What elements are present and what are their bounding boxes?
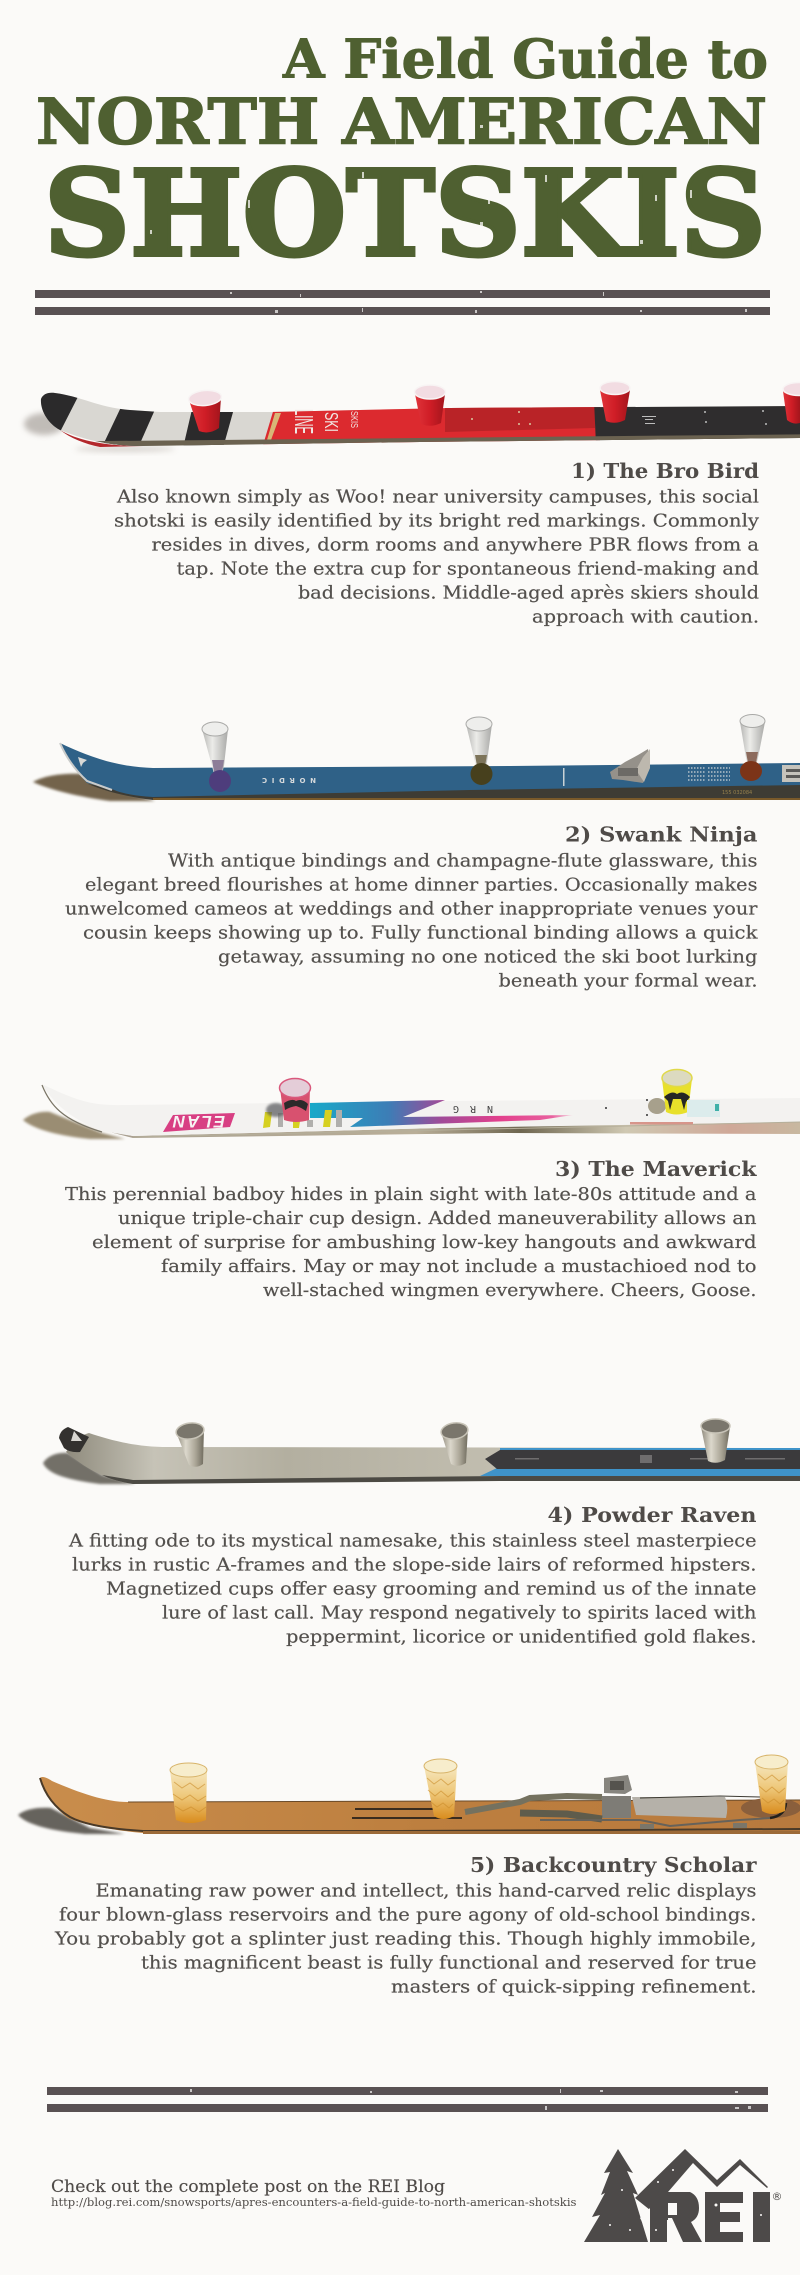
ski: maverick with mustache cups: NRG (453, 1103, 493, 1114)
title (36, 28, 768, 283)
title line: North American: NORTH AMERICAN (36, 84, 767, 158)
description: the bro bird: shotski is easily identified by its bright red markings. Commonly (114, 511, 760, 532)
icon: pine tree (584, 2149, 648, 2242)
ski lettering: SKIS (348, 411, 359, 428)
ski: backcountry scholar with amber glasses (18, 1755, 800, 1834)
description: powder raven: lure of last call. May respond negatively to spirits laced with (162, 1603, 757, 1624)
ski spec label (687, 1100, 720, 1117)
description: swank ninja: beneath your formal wear. (498, 970, 758, 991)
footer link text (51, 2177, 577, 2209)
description: backcountry scholar: masters of quick-sipping refinement. (391, 1977, 756, 1998)
red cup 3 (600, 382, 630, 423)
panel: the bro bird (24, 382, 800, 628)
amber glass 1 (170, 1763, 207, 1823)
heading: backcountry scholar: 5) Backcountry Scholar (470, 1853, 758, 1877)
description: powder raven: Magnetized cups offer easy grooming and remind us of the innate (106, 1579, 756, 1600)
description: backcountry scholar: Emanating raw power and intellect, this hand-carved relic displays (96, 1881, 757, 1902)
description: backcountry scholar: this magnificent beast is fully functional and reserved for true (141, 1953, 756, 1974)
flute 1 with purple liquid (202, 722, 231, 792)
ski lettering (289, 409, 359, 434)
description: swank ninja: unwelcomed cameos at weddings and other inappropriate venues your (65, 898, 758, 919)
icon: mountains (635, 2149, 768, 2220)
flute 3 with red liquid (740, 714, 765, 781)
description: the bro bird: Also known simply as Woo! near university campuses, this social (116, 487, 759, 508)
flute 2 with amber liquid (466, 717, 492, 785)
description: powder raven: peppermint, licorice or unidentified gold flakes. (286, 1627, 756, 1648)
logo letters: ® (772, 2190, 782, 2203)
description: the bro bird: bad decisions. Middle-aged après skiers should (298, 583, 759, 604)
binding plate and cables (465, 1775, 786, 1829)
description: the bro bird: tap. Note the extra cup for spontaneous friend-making and (176, 559, 759, 580)
binding (610, 749, 650, 783)
heading: the bro bird: 1) The Bro Bird (571, 459, 759, 483)
description: the maverick: well-stached wingmen everywhere. Cheers, Goose. (263, 1280, 756, 1301)
description: swank ninja: cousin keeps showing up to. Fully functional binding allows a quick (83, 922, 759, 943)
steel cup 2 (440, 1421, 469, 1466)
title line: Shotskis: SHOTSKIS (44, 144, 766, 283)
heading: swank ninja: 2) Swank Ninja (565, 823, 758, 847)
chair bars (263, 1110, 332, 1128)
description: the maverick (65, 1184, 757, 1301)
description: the bro bird (114, 487, 760, 628)
description: powder raven: lurks in rustic A-frames and the slope-side lairs of reformed hipsters. (72, 1555, 756, 1576)
steel cup 3 (701, 1419, 730, 1463)
raven tip cap (59, 1427, 89, 1452)
description: backcountry scholar: You probably got a splinter just reading this. Though highly immobile, (54, 1929, 757, 1950)
panel: powder raven (43, 1419, 800, 1648)
panel: backcountry scholar (18, 1755, 800, 1998)
elan logo (163, 1112, 235, 1132)
ski: swank ninja with champagne flutes (33, 714, 800, 801)
description: the bro bird: resides in dives, dorm rooms and anywhere PBR flows from a (152, 535, 759, 556)
pink mustache cup (280, 1078, 310, 1122)
elan logo: ELAN (172, 1112, 225, 1131)
footer double rule (47, 2087, 768, 2112)
neon graphic (310, 1100, 573, 1127)
description: swank ninja (65, 850, 759, 991)
header double rule (35, 290, 770, 315)
title distress specks (150, 48, 738, 244)
description: the maverick: family affairs. May or may not include a mustachioed nod to (161, 1256, 756, 1277)
description: backcountry scholar: four blown-glass reservoirs and the pure agony of old-school bindings. (59, 1905, 756, 1926)
ski: bro bird with red cups (24, 382, 800, 455)
icon: REI logo (584, 2149, 782, 2242)
steel cup 1 (175, 1421, 205, 1467)
logo letters (650, 2190, 782, 2242)
ski: powder raven with steel cups (43, 1419, 800, 1484)
description: swank ninja: elegant breed flourishes at home dinner parties. Occasionally makes (85, 874, 758, 895)
description: swank ninja: With antique bindings and champagne-flute glassware, this (168, 850, 758, 871)
heading: the maverick: 3) The Maverick (555, 1157, 757, 1181)
heading: powder raven: 4) Powder Raven (548, 1503, 757, 1527)
red cup 4 (783, 382, 800, 424)
amber glass 3 (755, 1755, 788, 1814)
footer link text: Check out the complete post on the REI Blog (51, 2177, 445, 2196)
panel: swank ninja (33, 714, 800, 991)
wooden disc (741, 1798, 800, 1818)
ski lettering: SKI (321, 412, 341, 432)
ski: swank ninja with champagne flutes: 155 032084 (722, 790, 752, 796)
red cup 1 (188, 389, 222, 432)
description: swank ninja: getaway, assuming no one noticed the ski boot lurking (218, 946, 758, 967)
yellow mustache cup (648, 1070, 692, 1114)
red cup 2 (414, 385, 446, 426)
description: the maverick: This perennial badboy hides in plain sight with late-80s attitude and a (65, 1184, 757, 1205)
ski lettering: NORDIC (262, 776, 316, 784)
footer link text: http://blog.rei.com/snowsports/apres-encounters-a-field-guide-to-north-american-shotskis (51, 2195, 577, 2209)
amber glass 2 (424, 1759, 457, 1819)
description: the maverick: element of surprise for ambushing low-key hangouts and awkward (92, 1232, 756, 1253)
description: powder raven: A fitting ode to its mystical namesake, this stainless steel masterpiece (68, 1531, 756, 1552)
title line: A Field Guide to: A Field Guide to (282, 28, 768, 90)
ski: maverick with mustache cups (23, 1070, 800, 1139)
panel: the maverick (23, 1070, 800, 1301)
ski: bro bird with red cups: LINE (289, 409, 319, 434)
description: the maverick: unique triple-chair cup design. Added maneuverability allows an (118, 1208, 757, 1229)
description: powder raven (68, 1531, 757, 1648)
description: backcountry scholar (54, 1881, 757, 1998)
description: the bro bird: approach with caution. (532, 607, 759, 628)
